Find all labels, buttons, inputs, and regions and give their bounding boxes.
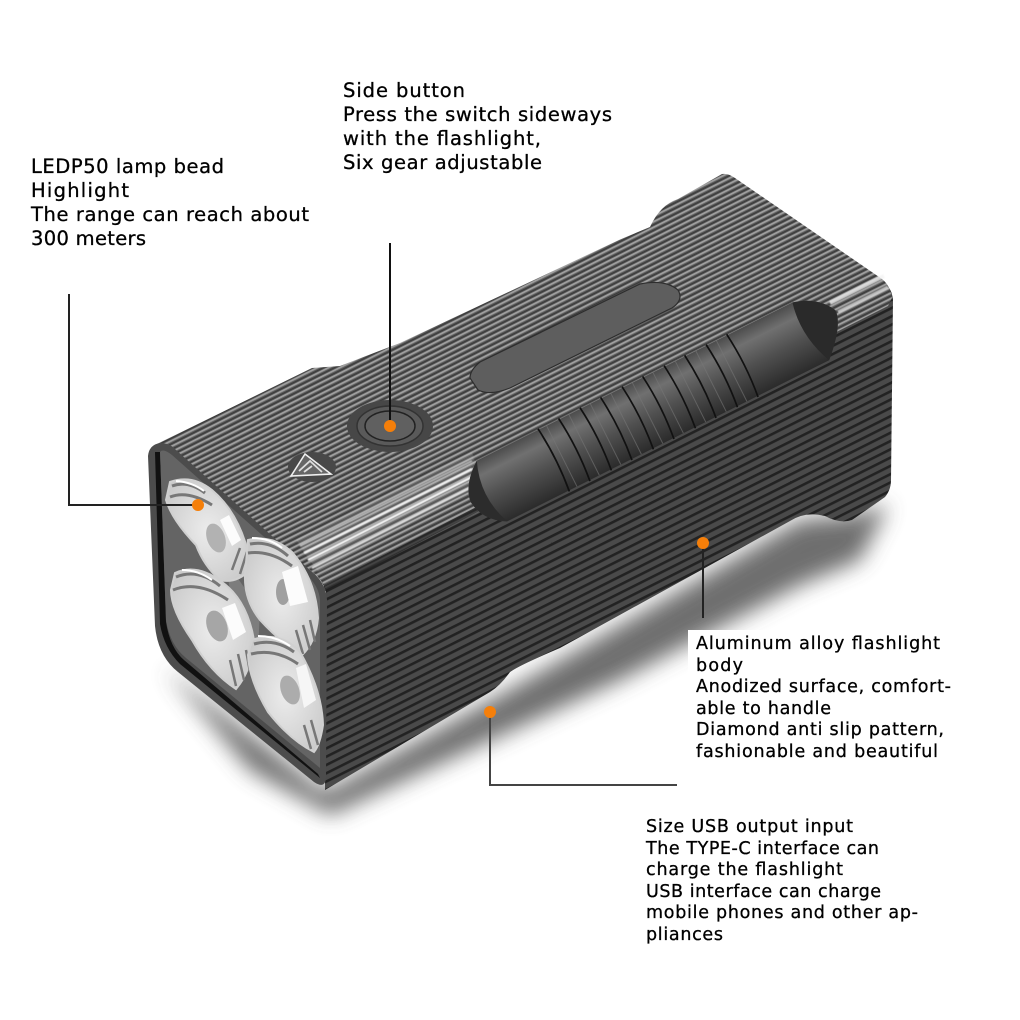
text block: USB: charge the flashlight [646,860,843,880]
lens right [245,538,318,655]
text block: lamp bead [30,155,309,250]
flashlight illustration [148,174,893,815]
text block: side button: Press the switch sideways [343,103,612,126]
marker: aluminum body [697,537,709,549]
text block: aluminum body [688,630,958,765]
leader line: lamp bead [69,294,198,505]
text block: USB [645,817,918,945]
flashlight top face [157,174,892,590]
text block: USB: USB interface can charge [646,882,881,902]
marker: lamp bead [192,499,204,511]
text block: side button: Side button [343,79,465,102]
text block: lamp bead: Highlight [31,179,129,202]
text block: lamp bead: The range can reach about [30,203,309,226]
text block: lamp bead: 300 meters [31,227,146,250]
leader line: USB [490,712,677,785]
lens lower left [171,570,254,689]
leader line: aluminum body [702,543,704,618]
handle grip [455,286,855,533]
text block: aluminum body: Aluminum alloy flashlight [696,634,940,654]
text block: USB: The TYPE-C interface can [645,839,879,859]
ground shadow [165,505,888,815]
text block: aluminum body: Anodized surface, comfort- [696,677,951,697]
lens top left [166,479,250,581]
flashlight side face [310,283,893,790]
leader line: side button [389,243,391,425]
text block: USB: mobile phones and other ap- [646,903,918,923]
display window [470,282,680,393]
icon: logo triangle [288,452,336,482]
marker: side button [384,420,396,432]
text block: USB: pliances [646,925,723,945]
text block: side button: with the flashlight, [343,127,541,150]
flashlight front face [148,443,327,785]
text block: aluminum body: fashionable and beautiful [696,742,938,762]
text block: side button [343,79,612,174]
text block: aluminum body: Diamond anti slip pattern, [696,720,944,740]
lens lower right [248,636,323,752]
text block: lamp bead: LEDP50 lamp bead [31,155,224,178]
lens center gaps [225,560,260,650]
marker: USB [484,706,496,718]
text block: aluminum body: able to handle [696,699,831,719]
text block: USB: Size USB output input [646,817,853,837]
text block: aluminum body: body [696,656,743,676]
text block: side button: Six gear adjustable [343,151,542,174]
highlight along edge [296,276,888,590]
lens cluster [166,479,323,752]
side button [347,400,433,452]
